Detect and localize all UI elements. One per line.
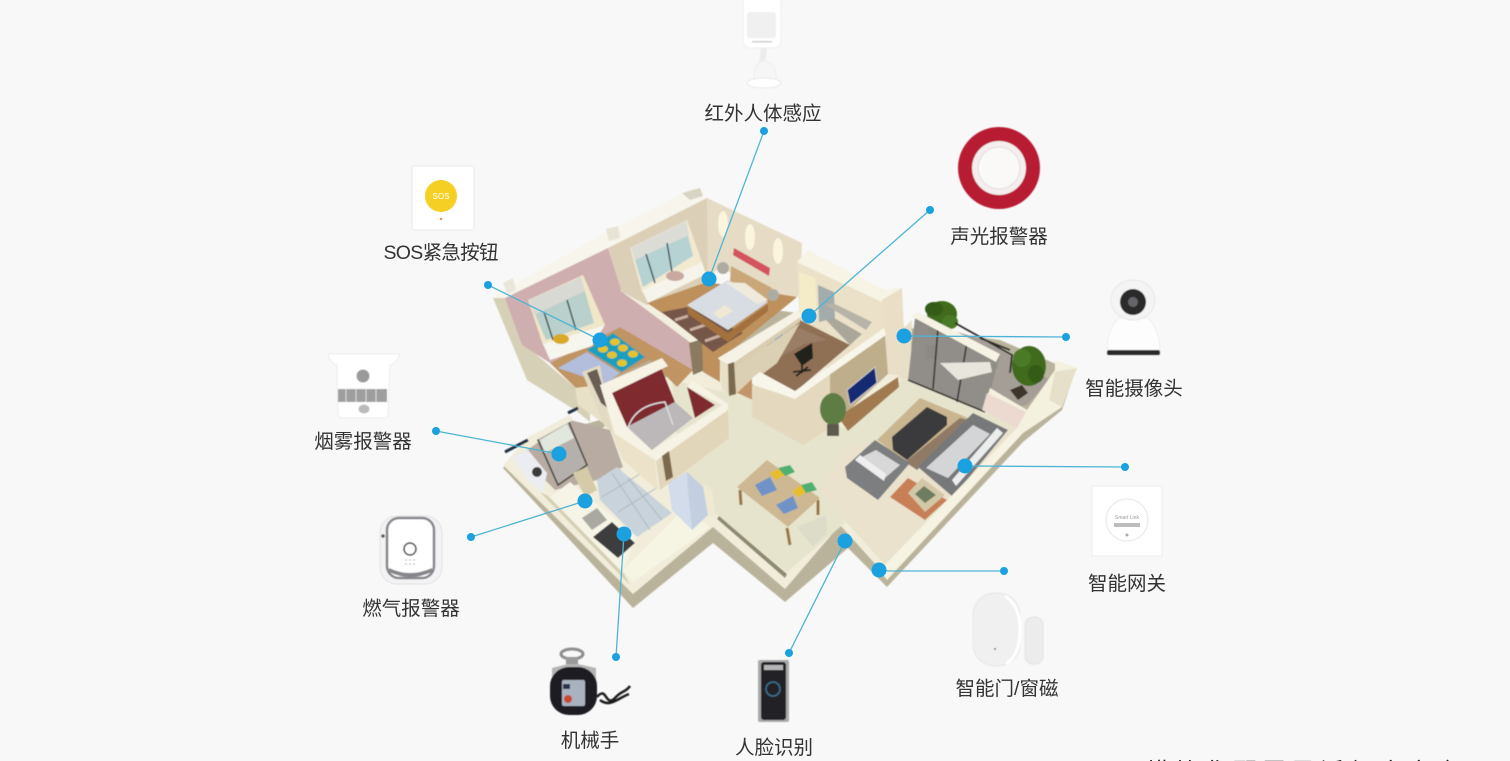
room: bathroom [582, 358, 729, 491]
connector lines [436, 131, 1125, 657]
label: gateway: 智能网关 [1088, 573, 1166, 595]
device: door and window sensor [973, 593, 1043, 666]
isometric apartment [493, 188, 1077, 608]
label: manipulator: 机械手 [561, 730, 619, 752]
tan block [573, 467, 597, 497]
wall tops [600, 358, 728, 462]
outer face right [656, 410, 729, 490]
plant back [925, 301, 958, 359]
floor warm glow near sofa [820, 425, 1017, 562]
glow panel [799, 272, 817, 316]
pink back wall [505, 248, 693, 372]
gray floor [627, 402, 693, 450]
placemats [755, 477, 777, 496]
tan wall behind bathroom [605, 360, 662, 392]
study front wall bright face [752, 373, 830, 445]
counter shadow [540, 492, 630, 585]
balcony wall [987, 360, 1077, 433]
yellow bed dots [598, 338, 638, 366]
window sill [543, 325, 605, 360]
balcony end pillar shade [1049, 368, 1077, 407]
glass door [537, 420, 587, 485]
device: smoke alarm [328, 354, 400, 418]
front wall groove [717, 516, 787, 578]
wall pillar [720, 360, 728, 393]
railing [955, 323, 1012, 373]
label: face recognition: 人脸识别 [735, 737, 813, 759]
kitchen tile floor [597, 467, 672, 537]
pillows [725, 282, 768, 304]
dark door strip [728, 362, 736, 396]
room: pink bedroom [493, 248, 705, 422]
sill cushion [666, 271, 684, 281]
left pillar [897, 320, 912, 380]
monitor [773, 328, 784, 349]
sofa [918, 413, 1008, 497]
left outer wall [493, 298, 590, 422]
curtain [631, 221, 689, 260]
window glass [530, 278, 594, 340]
stove [593, 522, 635, 558]
window recess [630, 220, 702, 292]
outer base ledge [503, 350, 1023, 594]
armchair [845, 440, 910, 500]
device: gas alarm [380, 516, 442, 584]
study back wall [797, 262, 885, 373]
pink lower wall [982, 393, 1026, 428]
TV cabinet [838, 377, 899, 431]
device: valve manipulator [550, 649, 630, 715]
label: gas alarm: 燃气报警器 [362, 598, 460, 620]
washer [512, 450, 547, 493]
room: main bedroom [608, 198, 802, 382]
window glass [632, 223, 693, 287]
label: smoke alarm: 烟雾报警器 [314, 431, 412, 453]
sink [582, 508, 607, 530]
blue bed cover [587, 333, 645, 372]
main floor [672, 376, 1017, 572]
chair [793, 343, 813, 376]
device: siren [958, 127, 1040, 209]
striped blanket [558, 352, 620, 384]
study wall top [752, 328, 886, 399]
device: camera [1107, 280, 1160, 355]
room: right balcony [897, 301, 1077, 433]
glass door [908, 318, 1000, 412]
TV [847, 367, 877, 405]
doorway wood [737, 378, 753, 400]
kitchen right wall [703, 483, 716, 520]
partition end [689, 339, 705, 375]
device: smart gateway: Smart Link [1115, 515, 1139, 521]
label: camera: 智能摄像头 [1085, 378, 1183, 400]
headboard [730, 266, 772, 300]
door strip [662, 451, 673, 481]
red back wall [612, 365, 675, 427]
shelves [826, 303, 872, 330]
connector dots [432, 127, 1129, 661]
room: study [718, 250, 906, 445]
dining chair [797, 515, 827, 547]
label: infrared sensor: 红外人体感应 [704, 103, 822, 125]
dining table legs [740, 490, 818, 545]
balcony floor [908, 320, 1050, 412]
red side wall [687, 387, 715, 418]
fridge [668, 472, 708, 530]
device: face recognition terminal [758, 660, 789, 722]
dining table top [737, 460, 820, 527]
study right outer wall [882, 288, 906, 376]
wood floor [647, 282, 797, 382]
desk [768, 328, 827, 357]
label: door sensor: 智能门/窗磁 [956, 678, 1058, 700]
balcony band [528, 415, 573, 442]
bedroom wall top [718, 310, 802, 368]
bedroom front wall face [727, 316, 800, 393]
plant front [1010, 346, 1046, 400]
yellow toy [553, 334, 569, 344]
white bed [687, 280, 768, 330]
lounge chair [940, 362, 992, 380]
window recess [528, 275, 605, 345]
label: siren: 声光报警器 [950, 226, 1048, 248]
coffee table [892, 407, 947, 460]
outer face left [617, 435, 658, 491]
label: SOS button: SOS紧急按钮 [384, 242, 498, 264]
door header [911, 312, 1000, 362]
TV wall textured [830, 335, 888, 428]
curtain [529, 277, 585, 315]
window [818, 285, 835, 322]
device: SOS button: SOS [433, 192, 449, 201]
patchwork rug [662, 307, 743, 352]
living and dining area [737, 367, 1008, 547]
shower glass [628, 402, 673, 428]
wood floor [550, 327, 693, 392]
device: infrared motion sensor [743, 0, 781, 88]
side table [908, 478, 945, 512]
balcony floor [520, 420, 623, 490]
bottom counter [623, 510, 710, 582]
wood floor [757, 320, 850, 392]
red wall painting [733, 248, 770, 276]
back left wall [608, 198, 710, 305]
wall beside bath [575, 385, 623, 460]
outer base side [503, 300, 1075, 608]
orange rug [890, 478, 947, 520]
device: smart gateway [1092, 486, 1162, 556]
wall top band [797, 250, 902, 302]
back right wall [707, 198, 802, 300]
railing [505, 408, 578, 452]
counter [550, 482, 637, 572]
bed frame [687, 304, 768, 342]
potted plant [820, 393, 846, 436]
spotlights [718, 211, 783, 264]
faint rear wall tops [495, 188, 707, 304]
partition wall top [620, 290, 702, 346]
rug [877, 398, 968, 470]
sill [642, 262, 706, 303]
nightstands [717, 262, 729, 274]
right front wall [880, 428, 1023, 580]
doorway wall and dark door [582, 365, 612, 432]
folded towels [713, 305, 733, 319]
room: left balcony and kitchen [505, 385, 716, 585]
device: SOS button [412, 166, 474, 230]
